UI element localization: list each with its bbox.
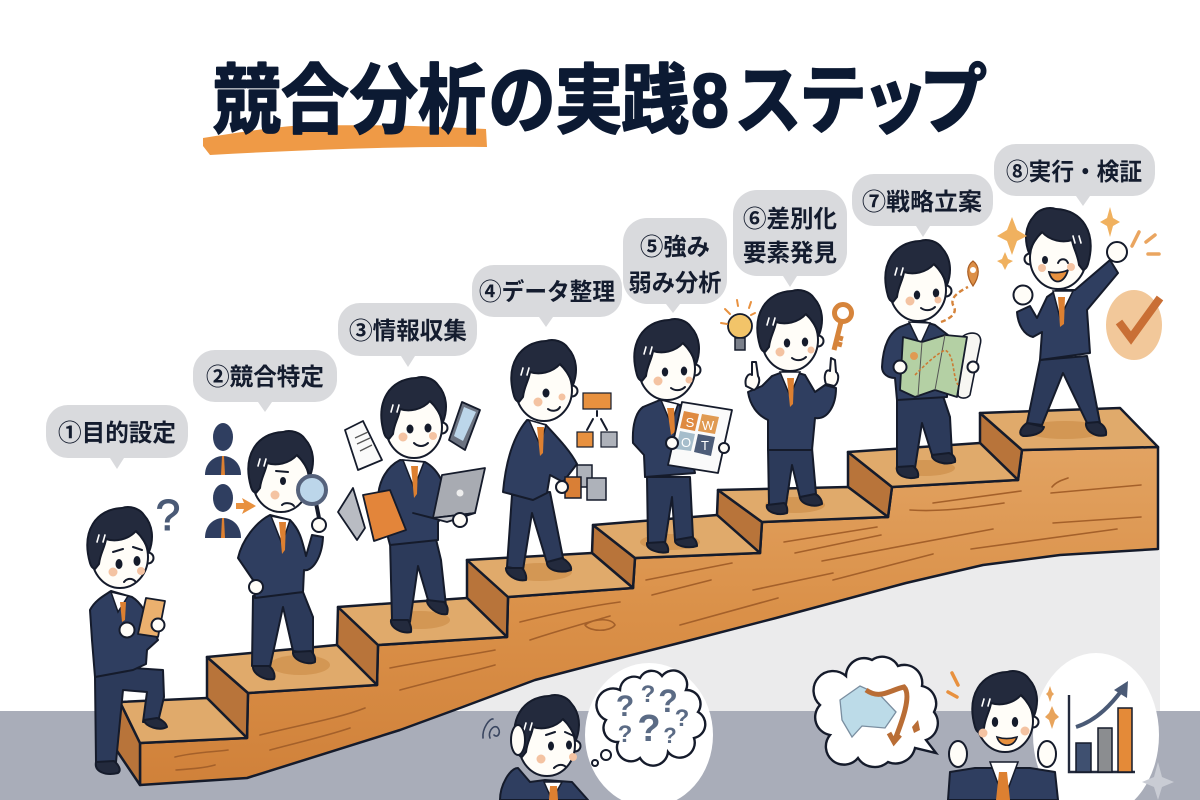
person 5 legs [647,477,693,543]
arrow: orange pointing at person 2 [236,498,256,514]
person 2 jacket [238,515,323,598]
icon: map pin with route [941,261,978,322]
person 3 laptop [433,468,485,518]
happy person with idea and chart [814,653,1159,800]
person 6: finding differentiators [746,290,838,514]
person 8 fists [1107,242,1127,262]
hand on head [511,725,525,755]
icon: sparkles [997,207,1120,270]
person 5: strengths and weaknesses [633,319,732,553]
step 1 bubble: ①目的設定 [58,420,176,447]
question marks: ? [658,683,678,719]
person 3 props behind [338,488,365,540]
white circle behind thought [585,663,713,800]
person 3 legs [390,535,446,622]
background: grey floor [0,711,1200,800]
wood grain [175,478,1141,770]
person 7 map [900,333,981,398]
person 6 jacket [748,370,836,450]
person 4 jacket [503,420,577,500]
person 3 head [381,377,448,458]
person 8 legs [1027,356,1100,425]
step 3 bubble: ③情報収集 [349,318,467,345]
icon: check mark in circle [1106,290,1162,360]
bar chart [1069,681,1135,772]
person 2 head [248,431,314,512]
title underline brush stroke [203,125,487,155]
question marks: ? [675,705,689,732]
step 8 bubble [994,144,1155,206]
idea thought cloud [814,657,938,767]
confused person with thought bubble [483,663,713,800]
person 2 legs [252,592,313,667]
person 1 head [87,507,154,588]
person 6 head [757,290,824,371]
step 4 bubble [472,265,622,327]
person 5 head [634,319,700,400]
question marks: ? [616,690,634,723]
confused person body [500,768,588,800]
person 5 SWOT board [668,402,732,473]
question marks: ? [641,681,655,708]
happy person body [948,768,1058,800]
step 1 bubble [46,405,188,469]
icon: light bulb [721,300,755,350]
step 5 bubble: ⑤強み [640,234,710,261]
person 1: goal setting [87,507,167,774]
icon: key [834,304,852,350]
person 5 SWOT board: T [701,438,709,453]
person 7 jacket [882,320,948,400]
icon: smartphone [449,402,480,450]
person 1 jacket [90,591,158,677]
step 7 bubble [852,174,993,237]
person 2: competitor identification [238,431,326,679]
person 3 jacket [378,460,448,545]
competitor silhouettes [205,423,241,538]
person 1 notepad and hands [138,598,165,637]
step 2 bubble: ②競合特定 [206,364,324,391]
person 5 SWOT board: S [686,415,695,430]
person 4 legs [507,492,563,570]
staircase front face [140,447,1158,785]
question marks: ? [637,708,661,750]
person 1 legs [95,668,164,762]
step 3 bubble [338,303,477,367]
person 5 SWOT board: W [702,418,715,433]
step 6 bubble: ⑥差別化 [743,206,837,233]
question marks: ? [663,723,677,748]
decorative sparkle corner [1142,762,1174,800]
staircase treads [120,408,1158,743]
step 4 bubble: ④データ整理 [479,278,615,306]
title [203,59,987,155]
fists [949,741,967,767]
person 5 jacket [633,400,695,477]
white circle behind chart [1033,653,1159,800]
step 7 bubble: ⑦戦略立案 [862,189,982,216]
person 7: strategy planning [882,240,981,478]
question marks: ? [618,721,632,748]
step 6 bubble [733,190,847,287]
question marks [616,681,689,750]
step 5 bubble: 弱み分析 [628,270,722,297]
person 3: information gathering [338,377,485,632]
orange ticks [948,673,958,697]
step 8 bubble: ⑧実行・検証 [1006,159,1142,186]
staircase [113,408,1158,785]
person 6 legs [768,448,816,505]
person 4 boxes [577,465,592,487]
step 6 bubble: 要素発見 [743,240,837,267]
sparkles [1046,686,1054,702]
person 6 hands [746,362,759,390]
person 4: data organisation [503,340,606,580]
icon: question mark: ? [156,491,180,540]
worry scribble [483,719,499,738]
icon: rays [1132,232,1159,254]
person 5 SWOT board: O [681,435,691,450]
happy person head [972,671,1038,752]
thought cloud [596,670,705,766]
person 8 head [1024,208,1091,289]
step 5 bubble [623,218,727,313]
tread shadows [270,421,1105,675]
person 8 jacket [1017,260,1118,360]
person 7 legs [897,396,952,468]
person 8: execution and verification [1014,208,1127,436]
step 2 bubble [193,350,337,412]
confused person head [514,695,580,776]
person 7 head [885,240,952,321]
person 4 head [511,340,578,421]
title text: 競合分析の実践8ステップ [213,59,987,144]
crumpled paper and orange arrow [840,686,896,737]
icon: org chart [577,393,617,447]
person 3 folder [363,490,406,541]
background: light wall under the staircase [460,549,1160,711]
staircase risers [113,413,1022,785]
person 2 magnifier [316,503,319,518]
